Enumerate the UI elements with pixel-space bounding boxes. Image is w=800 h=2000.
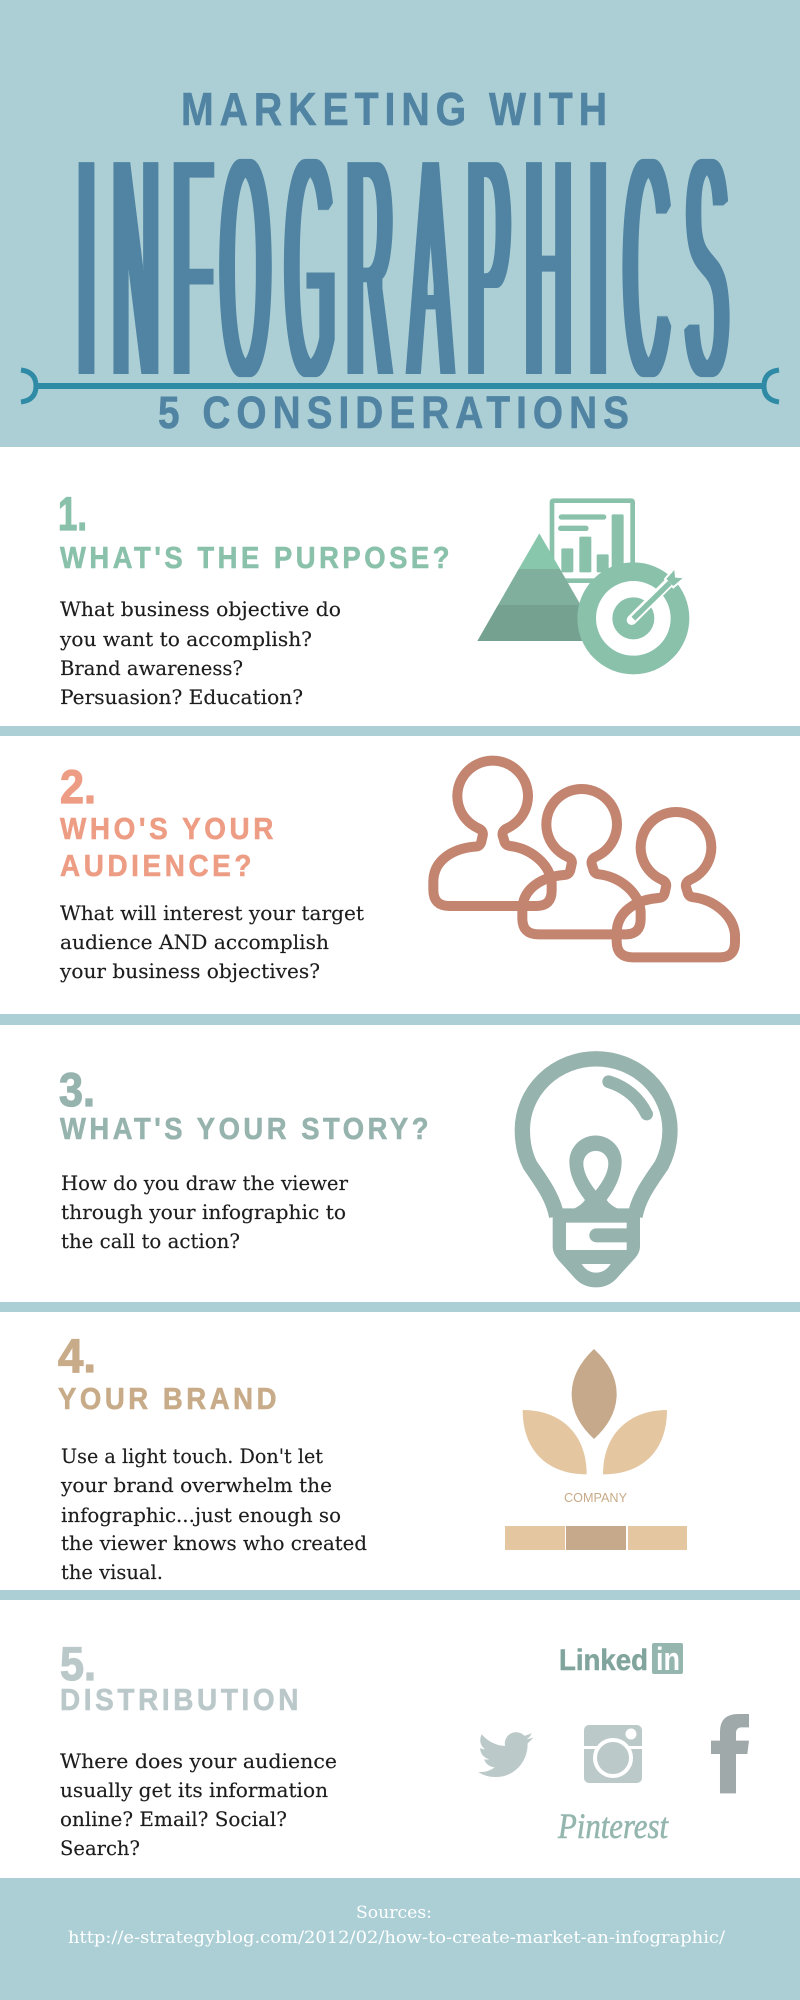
body text 3: through your infographic to [61, 1200, 346, 1224]
heading: who's your audience: WHO'S YOUR [60, 811, 277, 846]
body text 4: Use a light touch. Don't let [61, 1444, 323, 1468]
body text 4: infographic...just enough so [61, 1503, 341, 1527]
body text 4 [60, 1444, 367, 1584]
heading: who's your audience [60, 811, 277, 883]
divider bar 4 [0, 1590, 800, 1600]
divider bar 3 [0, 1302, 800, 1312]
body text 1 [59, 597, 341, 709]
body text 2 [59, 901, 364, 983]
icon: linkedin: Linked [559, 1644, 648, 1677]
number 5: 5. [60, 1637, 96, 1690]
body text 3: How do you draw the viewer [61, 1171, 348, 1195]
body text 2: audience AND accomplish [60, 930, 329, 954]
icon: pinterest: Pinterest [557, 1806, 669, 1846]
icon: instagram [584, 1725, 642, 1783]
footer panel [0, 1878, 800, 2000]
panel: 2 audience [59, 760, 735, 983]
divider bar 1 [0, 726, 800, 736]
body text 1: Persuasion? Education? [60, 685, 303, 709]
number 4: 4. [58, 1329, 96, 1382]
number 3: 3. [59, 1063, 95, 1116]
body text 4: the visual. [61, 1560, 163, 1584]
heading: what's your story: WHAT'S YOUR STORY? [60, 1111, 432, 1146]
sources text [68, 1903, 725, 1948]
icon: three people [433, 761, 735, 957]
title: marketing with: MARKETING WITH [181, 83, 613, 135]
body text 4: your brand overwhelm the [60, 1473, 332, 1497]
body text 3 [61, 1171, 348, 1253]
heading: who's your audience: AUDIENCE? [60, 848, 255, 883]
body text 5 [60, 1749, 337, 1860]
panel: 5 distribution [60, 1637, 749, 1860]
body text 5: usually get its information [60, 1778, 328, 1802]
icon: company logo: COMPANY [564, 1490, 627, 1505]
body text 1: What business objective do [60, 597, 341, 621]
number 1: 1. [58, 487, 87, 540]
body text 5: Search? [60, 1836, 140, 1860]
heading: your brand: YOUR BRAND [58, 1381, 280, 1416]
icon: facebook [711, 1714, 749, 1793]
panel: 1 purpose [58, 487, 689, 709]
body text 1: you want to accomplish? [59, 627, 312, 651]
body text 4: the viewer knows who created [61, 1531, 367, 1555]
icon: company logo [505, 1349, 687, 1550]
panel: 3 story [59, 1059, 670, 1287]
body text 3: the call to action? [61, 1229, 240, 1253]
body text 5: Where does your audience [60, 1749, 337, 1773]
heading: distribution: DISTRIBUTION [60, 1682, 302, 1717]
panel: 4 brand [58, 1329, 687, 1584]
divider bar 2 [0, 1014, 800, 1025]
title: infographics: INFOGRAPHICS [78, 90, 728, 448]
subtitle: 5 CONSIDERATIONS [158, 387, 635, 438]
icon: twitter [478, 1732, 533, 1777]
sources text: http://e-strategyblog.com/2012/02/how-to-create-market-an-infographic/ [68, 1928, 725, 1948]
sources text: Sources: [356, 1903, 432, 1923]
icon: light bulb [522, 1059, 670, 1287]
body text 2: your business objectives? [59, 959, 320, 983]
body text 5: online? Email? Social? [60, 1807, 287, 1831]
icon: linkedin: in [656, 1641, 680, 1677]
body text 2: What will interest your target [60, 901, 364, 925]
number 2: 2. [60, 760, 96, 813]
icon: report, pyramid and target [477, 501, 689, 674]
heading: what's the purpose: WHAT'S THE PURPOSE? [60, 540, 453, 575]
title divider with brackets [21, 370, 779, 402]
body text 1: Brand awareness? [60, 656, 243, 680]
header panel [0, 0, 800, 448]
